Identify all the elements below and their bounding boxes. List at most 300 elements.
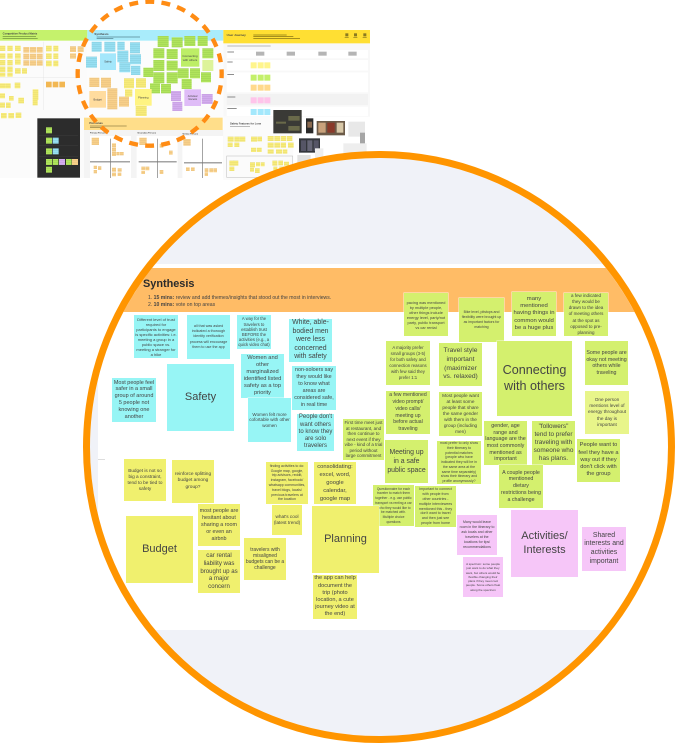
sticky: things in common: having things in [514,310,554,316]
theme sticky: Activities/Interests: Interests [523,544,566,556]
synthesis header band [124,268,634,312]
sticky: small group [112,378,156,422]
sticky: other countries: mentioned this - they [419,506,452,510]
sticky: first time meet: period without [349,448,378,453]
sticky: different level of trust: is specific activities: i.e. [135,332,177,336]
sticky: reinforce splitting [172,460,214,503]
sticky: followers [532,421,575,465]
dashed highlight circle [78,2,222,146]
sticky: questionnaire: be matched with. [381,510,406,514]
sticky: bike level [459,298,504,342]
sticky: consolidating: calendar, [323,488,347,494]
sticky: way out: don't click with [580,464,617,470]
sticky: car rental: brought up as [200,568,238,575]
sticky: non-soloers [292,366,336,410]
sticky: different level of trust: required for [146,322,166,326]
sticky: bike level: flexibility were brought up [462,315,501,319]
sticky: women felt comfortable: cofortable with other [249,417,290,422]
sticky: gender age language: important [494,456,517,462]
sticky: first time meet: at restaurant, and [346,426,381,431]
sticky: car rental: liability was [204,560,234,567]
theme sticky: Connecting with others [497,341,572,416]
sticky: women felt comfortable: women [262,423,277,428]
sticky: car rental: concern [208,583,230,590]
sticky: travel style: (maximizer [444,364,477,372]
sticky: not meeting others: okay not meeting [586,356,627,362]
sticky: questionnaire [373,485,414,526]
sticky: ask locals: travelers at the [465,535,489,539]
sticky: ask locals: locations for tips/ [464,540,490,544]
sticky: women and marginalized: identified listed [244,376,281,382]
sticky: dietary restrictions: dietary [513,483,529,489]
panel: safety features thumbnail [223,117,294,180]
sticky: misaligned budgets: misaligned [253,553,277,559]
sticky: document the trip: location, a cute [316,597,354,603]
sticky: same gender: group (including [444,423,477,428]
sticky: small group: Most people feel [114,380,154,386]
sticky: establish trust: quick video chat) [238,342,270,347]
sticky: sharing a room [198,504,240,546]
sticky: different level of trust: public space vs. [142,342,170,346]
sticky: itinerary matches [437,441,481,484]
panel: safety features thumbnail: Safety Features for Lone [230,122,262,126]
sticky: video prompts: traveling [398,426,418,432]
sticky: budget not constraint: tend to be tied to [128,480,162,485]
sticky: women and marginalized [241,354,284,398]
sticky: sharing a room: most people are [200,508,238,514]
sticky: itinerary matches: indicated they will be in [441,460,477,464]
sticky: video prompts: video calls/ [395,406,421,412]
sticky: women and marginalized: priority [254,390,271,396]
sticky: women and marginalized: other [256,362,269,368]
sticky: small groups preference: with few said they [391,369,425,374]
sticky: way out [577,439,620,482]
sticky: sharing a room: airbnb [212,536,226,542]
sticky: solo travelers: want others [300,422,331,428]
sticky: questionnaire: transport vs renting a car [375,501,412,505]
sticky: itinerary matches: the same area at the [443,465,475,469]
panel: synthesis thumbnail: Budget [93,97,102,101]
sticky: level of energy: energy throughout [588,409,626,414]
sticky: sharing a room: hesitant about [202,514,236,520]
sticky: small groups preference: connection reasons [389,363,427,368]
sticky: not meeting others: traveling [596,370,617,376]
sticky: spectrum: want, but others would be [466,571,500,575]
sticky: gender age language: gender, age [491,423,520,429]
panel: personas thumbnail: Primary Persona [90,133,107,135]
sticky: consolidating: excel, word, [320,472,350,478]
sticky: video prompts: meeting up [395,412,421,418]
sticky: followers: traveling with [535,439,572,446]
sticky: gender age language: range and [493,430,518,436]
sticky: meeting at the spot: drawn to the idea [569,305,603,310]
sticky: shared interests: important [590,558,618,565]
sticky: car rental [198,550,240,593]
sticky: things in common: be a huge plus [515,325,553,331]
heading: Synthesis: Synthesis [143,278,194,290]
instructions list [148,295,331,307]
theme sticky: Activities/Interests: Activities/ [521,530,568,542]
sticky: spectrum: people. Some others float [466,583,500,587]
sticky: document the trip [313,575,357,619]
sticky: pacing: energy level, party/not [407,314,445,320]
sticky: budget not constraint: big a constraint, [128,474,162,479]
sticky: questionnaire: Multiple choice [383,515,404,519]
sticky: shared interests [582,527,626,571]
sticky: what's cool [272,505,302,535]
sticky: sharing a room: or even an [206,528,232,534]
sticky: establish trust: travelers to [244,322,264,327]
panel: dark screenshot board [37,118,80,178]
sticky: way out: way out if they [580,457,617,463]
sticky: white able-bodied men: with safety [294,353,327,360]
sticky: first time meet: vibe - kind of a trial [345,442,382,447]
sticky: finding activities: travel blogs, locals/ [272,488,302,492]
sticky: itinerary matches: show their itinerary and [441,474,477,478]
sticky: pacing: other things include [409,310,443,314]
sticky: non-soloers: non-soloers say [295,367,333,373]
sticky: same gender: men) [455,429,466,434]
sticky: itinerary matches: profile anonymously? [442,479,476,483]
panel: personas thumbnail: Secondary Persona [137,133,157,135]
sticky: meeting up in safe public space: in a safe [393,458,420,465]
sticky: ask locals: ask locals and other [461,530,493,534]
panel: competitive product matrix [0,30,87,178]
sticky: consolidating: consolidating: [317,464,353,470]
sticky: meeting at the spot [564,293,608,336]
sticky: level of energy [585,391,629,434]
sticky: dietary restrictions: A couple people [502,470,540,476]
sticky: other countries: with people from [422,492,449,496]
panel: synthesis thumbnail: Safety [104,60,112,64]
sticky: spectrum: flexible changing their [468,575,498,579]
sticky: misaligned budgets [244,538,286,580]
sticky: level of energy: important [597,422,617,427]
panel: app screenshots thumbnail [273,110,367,165]
sticky: finding activities: instagram, facebook/ [271,478,303,482]
panel: synthesis thumbnail: Planning [138,95,149,99]
sticky: questionnaire: - who they would like to [376,506,411,510]
sticky: what's cool: what's cool [275,514,299,519]
sticky: travel style: Travel style [444,347,477,354]
sticky: pacing: vs car rental [415,324,437,330]
sticky: different level of trust: meeting a group in a [138,336,174,342]
sticky: level of energy: the day is [597,416,617,421]
sticky: same gender [439,392,482,436]
sticky: ask locals: recommendations [463,545,491,549]
sticky: first time meet: then continue to [347,431,380,436]
sticky: other countries: Important to connect [419,487,452,491]
instructions list: 1. 15 mins: review and add themes/insights that stood out the most in interviews. [148,295,331,301]
sticky: ask locals: room in the itinerary to [460,525,494,529]
panel: synthesis thumbnail: Connecting [182,54,198,58]
sticky: bike level: as important factors for [464,320,499,324]
panel: personas thumbnail: Personas [89,121,103,125]
theme sticky: Connecting with others: Connecting [503,363,566,377]
sticky: first time meet: large commitment [346,453,381,458]
sticky: travel style [439,343,482,386]
sticky: level of energy: One person [595,397,619,402]
panel: competitive product matrix: Competitive Product Matrix [3,32,38,36]
sticky: identity verification: all that was asked [194,324,223,328]
sticky: followers: "followers" [539,423,568,430]
sticky: things in common: many [527,296,541,302]
panel: personas thumbnail: Tertiary Persona [182,132,199,135]
sticky: meeting at the spot: planning [577,330,594,335]
sticky: not meeting others [585,341,628,385]
sticky: spectrum: A spectrum: some people [466,562,500,566]
sticky: other countries [415,486,456,527]
sticky: non-soloers: considered safe, [294,395,334,401]
sticky: other countries: people from home [421,521,450,525]
sticky: document the trip: journey video at [315,604,355,610]
theme sticky: Safety [167,364,234,431]
sticky: same gender: at least some [447,399,474,404]
sticky: followers: someone who [534,447,573,454]
sticky: bike level: matching [474,325,489,329]
theme sticky: Safety: Safety [185,391,216,403]
sticky: solo travelers [297,414,334,451]
sticky: identity verification: identity verification [193,334,224,338]
sticky: reinforce splitting: group? [186,485,200,490]
sticky: way out: People want to [580,442,617,448]
sticky: other countries: and then just see [422,516,449,520]
sticky: women and marginalized: Women and [247,355,278,361]
sticky: gender age language: mentioned as [489,450,522,456]
sticky: things in common [512,292,556,336]
sticky: establish trust: A way for the [242,316,266,321]
sticky: solo travelers: to know they [299,429,332,435]
sticky: meeting up in safe public space: public space [387,467,426,474]
sticky: document the trip: document the [318,583,352,589]
sticky: other countries: other countries - [423,497,448,501]
sticky: itinerary matches: (people who have [445,455,473,459]
sticky: small group: group of around [115,393,153,399]
sticky: pacing: pacing was mentioned [407,300,445,304]
theme sticky: Budget: Budget [142,543,177,555]
sticky: things in common: common would [514,318,554,324]
sticky: other countries: don't want to travel [420,511,451,515]
sticky: spectrum: plans if they meet cool [468,579,498,583]
theme sticky: Planning: Planning [324,533,367,545]
sticky: itinerary matches: potential matches [445,451,473,455]
sticky: women and marginalized: safety as a top [244,383,281,389]
sticky: budget not constraint: Budget is not so [128,468,162,473]
sticky: different level of trust: meeting a stranger for [136,346,176,352]
sticky: finding activities: the location [278,497,296,501]
sticky: small group: safer in a small [115,386,152,392]
sticky: not meeting others: others while [592,363,621,369]
sticky: small group: another [125,414,143,420]
sticky: dietary restrictions: mentioned [509,476,533,482]
sticky: meeting at the spot: at the spot as [572,318,600,323]
panel: synthesis thumbnail: Synthesis [94,32,109,36]
sticky: finding activities: previous travelers at [271,493,303,497]
sticky: video prompts [386,391,430,434]
instructions list: 2. 10 mins: vote on top areas [148,302,215,308]
sticky: women and marginalized: marginalized [246,369,279,375]
sticky: not meeting others: Some people are [586,350,627,356]
sticky: finding activities: whatsapp communities, [269,483,305,487]
sticky: first time meet [343,419,384,460]
sticky: misaligned budgets: challenge [254,565,276,571]
sticky: establish trust: establish trust [241,327,267,332]
panel: personas thumbnail [84,118,223,178]
sticky: same gender: with them in the [444,417,477,422]
sticky: pacing: by multiple people, [410,304,442,310]
sticky: first time meet: First time meet just [344,420,382,425]
sticky: different level of trust: participants to engage [136,326,176,332]
sticky: meeting at the spot: a few indicated [571,293,601,298]
theme sticky: Planning [312,506,379,573]
sticky: same gender: Most people want [442,393,479,398]
sticky: shared interests: Shared [593,532,615,539]
sticky: itinerary matches: most prefer to only show [440,441,478,445]
sticky: consolidating: google map [320,496,350,502]
sticky: finding activities: trip advisors, reddit, [272,473,302,477]
sticky: white able-bodied men: White, able- [292,319,329,326]
sticky: meeting at the spot: opposed to pre- [570,324,602,329]
sticky: small groups preference: small groups (3-5) [391,351,425,356]
sticky: small groups preference: for both safety and [390,357,426,362]
sticky: video prompts: video prompt/ [393,399,423,405]
orange ring around zoomed view [83,151,675,743]
sticky: followers: tend to prefer [534,431,572,438]
sticky: questionnaire: traveler to match them [377,491,410,495]
theme sticky: Activities/Interests [511,510,578,577]
sticky: video prompts: a few mentioned [389,392,427,398]
sticky: car rental: a major [209,575,229,582]
sticky: itinerary matches: same time separately) [442,470,476,474]
panel: synthesis thumbnail: Activities/ [188,95,198,98]
sticky: consolidating [314,462,356,504]
panel: user journey thumbnail: User Journey [227,33,246,37]
sticky: non-soloers: to know what [298,381,330,387]
sticky: itinerary matches: their itinerary to [447,446,471,450]
sticky: white able-bodied men: concerned [294,345,327,352]
zoomed synthesis board inside circle [90,158,634,736]
sticky: spectrum: along the spectrum [470,588,496,592]
sticky: gender age language: most commonly [487,443,524,449]
sticky: document the trip: trip (photo [322,590,348,596]
sticky: questionnaire: Questionnaire for each [377,487,410,491]
sticky: establish trust [237,315,271,349]
sticky: dietary restrictions: a challenge [507,497,535,503]
sticky: document the trip: the app can help [314,575,356,581]
sticky: meeting up in safe public space: Meeting up [389,449,424,456]
sticky: identity verification: indicated a thorough [192,329,225,333]
sticky: questionnaire: questions [386,520,401,524]
sticky: pacing: party, public transport [407,320,445,324]
sticky: level of energy: mentions level of [589,403,625,408]
sticky: reinforce splitting: reinforce splitting [175,472,211,477]
sticky: first time meet: next event if they [346,437,380,442]
sticky: non-soloers: in real time [301,402,327,408]
sticky: small groups preference [386,341,430,385]
sticky: document the trip: the end) [325,611,345,617]
sticky: establish trust: BEFORE the [242,332,266,337]
sticky: gender age language: language are the [485,436,526,442]
sticky: small groups preference: prefer 1:1 [399,375,417,380]
sticky: white able-bodied men [289,319,332,362]
sticky: ask locals: Many would leave [463,520,491,524]
theme sticky: Connecting with others: with others [504,378,565,392]
sticky: misaligned budgets: budgets can be a [246,559,284,565]
sticky: solo travelers: travelers [304,443,327,449]
sticky: consolidating: google [326,480,344,486]
sticky: women felt comfortable: Women felt more [252,412,287,417]
sticky: shared interests: interests and [584,540,624,547]
sticky: budget not constraint: safety [139,486,151,491]
sticky: identity verification [187,315,230,359]
sticky: spectrum: just want to do what they [466,566,500,570]
sticky: small group: knowing one [119,407,149,413]
sticky: finding activities: finding activities to do: [270,464,304,468]
sticky: spectrum [463,557,503,597]
sticky: video prompts: before actual [393,419,423,425]
sticky: solo travelers: People don't [299,414,332,420]
sticky: travel style: important [447,356,474,363]
sticky: different level of trust: a hike [151,352,161,356]
sticky: white able-bodied men: were less [296,336,325,343]
sticky: pacing [404,293,448,336]
sticky: bike level: Bike level, pitstops and [464,310,499,314]
sticky: travel style: vs. relaxed) [443,373,478,380]
sticky: followers: has plans. [539,455,568,462]
sticky: meeting at the spot: of meeting others [569,311,603,316]
sticky: identity verification: them to use the app [192,345,225,349]
panel: synthesis thumbnail: Interests [188,98,198,101]
sticky: different level of trust [134,315,178,358]
sticky: non-soloers: they would like [296,374,332,380]
sticky: finding activities [266,462,308,504]
panel: synthesis thumbnail [86,30,223,118]
sticky: reinforce splitting: budget among [178,478,208,483]
sticky: small groups preference: A majority prefer [392,345,424,350]
sticky: questionnaire: together - e.g. use public [375,496,412,500]
sticky: gender age language [484,421,527,465]
sticky: budget not constraint [124,459,166,501]
sticky: dietary restrictions: restrictions being [501,490,541,496]
sticky: what's cool: (latest trend) [274,520,300,525]
sticky: same gender: people that share [442,405,479,410]
sticky: white able-bodied men: bodied men [292,328,328,335]
panel: user journey thumbnail [223,30,370,117]
sticky: way out: the group [586,471,611,477]
sticky: way out: feel they have a [578,450,619,456]
sticky: different level of trust: Different level of trust [137,316,175,322]
sticky: small group: 5 people not [119,400,149,406]
sticky: establish trust: activities (e.g., a [239,337,269,342]
sticky: dietary restrictions [499,465,543,508]
sticky: sharing a room: sharing a room [201,522,237,528]
sticky: identity verification: process will encourage [190,340,227,344]
sticky: finding activities: Google map, google, [271,469,303,473]
sticky: meeting at the spot: they would be [572,299,600,304]
sticky: shared interests: activities [591,549,617,556]
sticky: same gender: the same gender [443,411,478,416]
sticky: car rental: car rental [206,552,232,559]
sticky: women felt comfortable [248,398,291,442]
sticky: things in common: mentioned [520,303,548,309]
sticky: non-soloers: areas are [303,388,325,394]
sticky: ask locals [457,515,497,555]
sticky: other countries: multiple interviewees [419,502,452,506]
sticky: misaligned budgets: travelers with [250,547,280,553]
theme sticky: Budget [126,516,193,583]
sticky: meeting up in safe public space [385,440,428,483]
panel: synthesis thumbnail: with others [183,58,198,62]
